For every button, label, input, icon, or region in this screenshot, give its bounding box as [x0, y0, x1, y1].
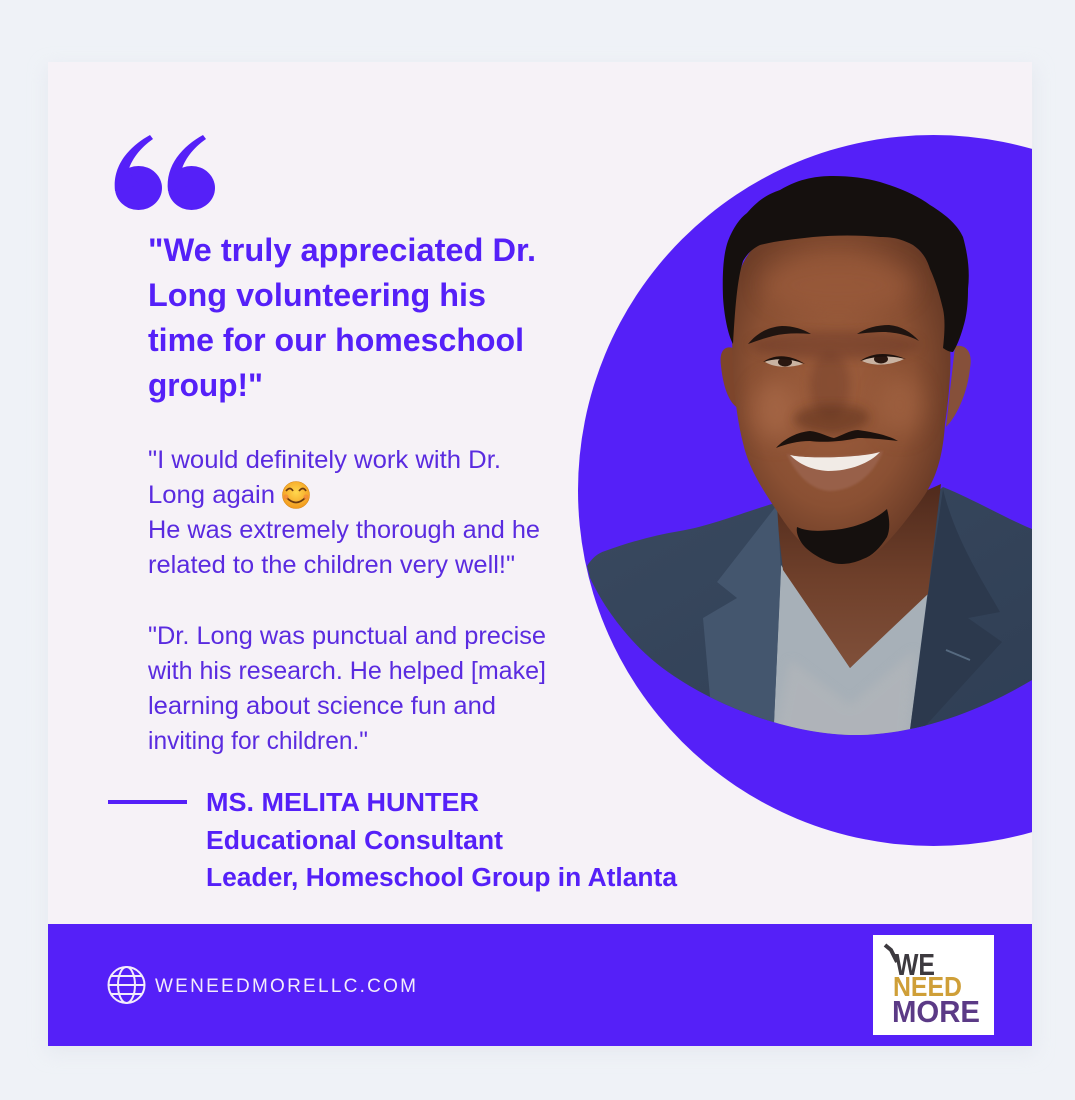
lapel buttonhole — [946, 650, 970, 660]
logo: NEED — [893, 971, 962, 1002]
portrait photo illustration — [587, 176, 1032, 745]
attribution: MS. MELITA HUNTER — [206, 789, 479, 817]
face — [732, 232, 950, 566]
purple circle behind portrait — [578, 135, 1075, 846]
first testimonial text: related to the children very well!" — [148, 551, 515, 579]
logo — [873, 935, 994, 1035]
attribution rule — [108, 800, 187, 804]
second testimonial text: learning about science fun and — [148, 692, 496, 720]
lips — [787, 451, 883, 491]
quotation mark icon — [115, 135, 215, 210]
headline quote: Long volunteering his — [148, 277, 486, 313]
headline quote — [148, 232, 536, 403]
second testimonial text: "Dr. Long was punctual and precise — [148, 622, 546, 650]
first testimonial text: He was extremely thorough and he — [148, 516, 540, 544]
ears — [721, 347, 738, 408]
headline quote: group!" — [148, 367, 263, 403]
mustache — [776, 430, 898, 448]
right eyebrow — [857, 325, 919, 341]
first testimonial text — [148, 446, 540, 579]
left eye — [765, 359, 803, 367]
headline quote: time for our homeschool — [148, 322, 524, 358]
t-shirt — [773, 565, 928, 745]
footer band — [48, 924, 1032, 1046]
first testimonial text: "I would definitely work with Dr. — [148, 446, 501, 474]
attribution — [206, 789, 678, 892]
logo: MORE — [892, 994, 980, 1029]
right eye — [862, 355, 904, 365]
jacket — [587, 487, 1032, 745]
attribution: Educational Consultant — [206, 827, 504, 855]
teeth — [790, 452, 880, 471]
hair — [723, 176, 969, 352]
neck — [775, 484, 941, 668]
attribution: Leader, Homeschool Group in Atlanta — [206, 864, 678, 892]
second testimonial text: with his research. He helped [make] — [147, 657, 546, 685]
website address: WENEEDMORELLC.COM — [155, 976, 416, 997]
goatee — [797, 509, 889, 564]
icon: smiling emoji — [282, 482, 310, 508]
icon: globe — [108, 967, 144, 1003]
first testimonial text: Long again — [148, 481, 275, 509]
facial shading — [750, 257, 922, 440]
second testimonial text — [147, 622, 546, 755]
left eyebrow — [748, 326, 811, 344]
right lapel — [908, 489, 1002, 745]
left lapel — [703, 508, 781, 722]
second testimonial text: inviting for children." — [148, 727, 368, 755]
headline quote: "We truly appreciated Dr. — [148, 232, 536, 268]
logo: WE — [895, 947, 935, 982]
